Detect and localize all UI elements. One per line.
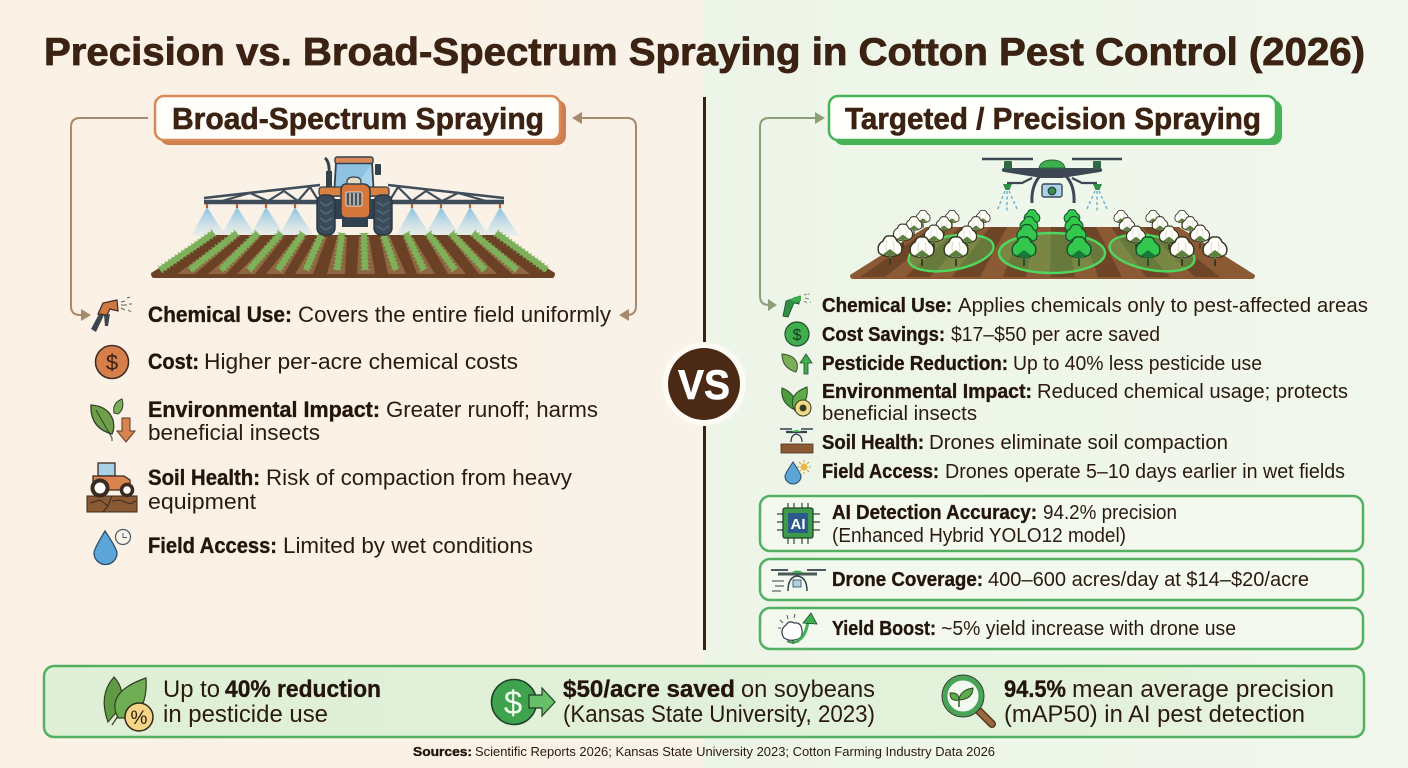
item: environmental impact: Reduced chemical usage; protects	[1037, 381, 1348, 403]
background: precision side	[704, 0, 1408, 768]
icon: leaves with percent badge	[104, 677, 153, 731]
stat: savings per acre: on soybeans	[741, 676, 875, 703]
icon: leaves with beneficial insect	[782, 387, 811, 416]
item: chemical use	[91, 297, 611, 332]
spray boom	[204, 185, 504, 208]
heading: broad-spectrum spraying	[155, 96, 566, 145]
icon: dollar coin with arrow	[492, 680, 555, 724]
item: pesticide reduction: Up to 40% less pesticide use	[1013, 353, 1262, 375]
callout: AI detection accuracy	[760, 496, 1363, 551]
item: field access: Field Access:	[822, 461, 939, 483]
heading: broad-spectrum spraying: Broad-Spectrum Spraying	[172, 101, 544, 136]
arrow: chemical use to heading, right	[572, 112, 636, 321]
item: soil health	[87, 463, 572, 514]
cotton field	[850, 227, 1255, 279]
item: field access	[785, 460, 1345, 484]
item: soil health	[780, 429, 1228, 454]
item: field access	[94, 530, 533, 564]
icon: dollar coin: $	[106, 350, 118, 375]
crop field	[151, 233, 555, 278]
item: field access: Drones operate 5–10 days earlier in wet fields	[945, 461, 1345, 483]
stat: pesticide reduction	[104, 676, 381, 731]
stat: pesticide reduction: in pesticide use	[163, 701, 328, 728]
callout: drone coverage	[760, 559, 1363, 600]
icon: AI chip: AI	[790, 516, 806, 533]
item: chemical use: Chemical Use:	[822, 295, 952, 317]
item: chemical use: Applies chemicals only to pest-affected areas	[958, 295, 1368, 317]
callout: yield boost	[760, 608, 1363, 649]
icon: leaf and up arrow	[782, 354, 812, 374]
stat: savings per acre: $50/acre saved	[563, 676, 735, 703]
icon: flying drone	[771, 570, 826, 591]
heading: targeted precision spraying: Targeted / Precision Spraying	[845, 101, 1261, 136]
icon: drone above soil	[780, 429, 813, 453]
callout: AI detection accuracy: (Enhanced Hybrid YOLO12 model)	[832, 525, 1126, 547]
banner: key statistics	[44, 666, 1364, 737]
item: cost savings	[785, 322, 1160, 346]
icon: cotton boll with up arrow	[778, 613, 817, 644]
icon: AI chip	[777, 503, 820, 544]
item: environmental impact: Environmental Impact:	[822, 381, 1032, 403]
stat: mean average precision: mean average precision	[1072, 676, 1334, 703]
icon: water drop and clock	[94, 530, 130, 564]
stat: mean average precision: (mAP50) in AI pest detection	[1004, 701, 1305, 728]
stat: pesticide reduction: 40% reduction	[225, 676, 381, 703]
icon: water drop and sun	[785, 460, 811, 484]
item: environmental impact: beneficial insects	[148, 420, 320, 445]
panel: broad-spectrum spraying	[71, 96, 636, 564]
callout: AI detection accuracy: AI Detection Accuracy:	[832, 502, 1037, 524]
icon: spray nozzle	[91, 297, 132, 332]
background: broad-spectrum side	[0, 0, 704, 768]
VS badge: VS	[678, 361, 730, 408]
callout: yield boost: Yield Boost:	[832, 618, 936, 640]
item: pesticide reduction: Pesticide Reduction:	[822, 353, 1008, 375]
panel: targeted precision spraying	[760, 96, 1368, 649]
item: pesticide reduction	[782, 353, 1262, 375]
item: environmental impact	[782, 381, 1348, 425]
icon: tractor on cracked soil	[87, 463, 137, 512]
cotton plants: untreated	[878, 210, 1227, 266]
drone	[982, 159, 1122, 203]
item: cost: Higher per-acre chemical costs	[204, 349, 518, 374]
item: soil health: equipment	[148, 489, 256, 514]
item: soil health: Soil Health:	[822, 432, 924, 454]
callout: drone coverage: 400–600 acres/day at $14–$20/acre	[988, 569, 1309, 591]
centre divider	[703, 97, 706, 650]
item: environmental impact: Environmental Impact:	[148, 397, 380, 422]
callout: yield boost: ~5% yield increase with drone use	[941, 618, 1236, 640]
illustration: drone over cotton field	[850, 159, 1255, 279]
item: soil health: Soil Health:	[148, 465, 260, 490]
sources: Scientific Reports 2026; Kansas State University 2023; Cotton Farming Industry Data 2026	[475, 745, 995, 759]
title: Precision vs. Broad-Spectrum Spraying in Cotton Pest Control (2026)	[44, 31, 1365, 74]
item: soil health: Risk of compaction from heavy	[266, 465, 572, 490]
item: cost: Cost:	[148, 349, 199, 374]
callout: drone coverage: Drone Coverage:	[832, 569, 983, 591]
stat: mean average precision: 94.5%	[1004, 676, 1066, 703]
item: cost savings: $17–$50 per acre saved	[951, 324, 1160, 346]
icon: leaf and down arrow	[91, 399, 135, 442]
illustration: tractor boom sprayer over crop rows	[151, 157, 555, 278]
stat: mean average precision	[942, 675, 1334, 728]
icon: green dollar coin	[785, 322, 809, 346]
stat: pesticide reduction: Up to	[163, 676, 220, 703]
item: field access: Field Access:	[148, 533, 277, 558]
spray droplets	[997, 191, 1108, 213]
list: broad-spectrum attributes	[87, 297, 611, 564]
tractor	[317, 157, 392, 235]
item: cost	[96, 346, 518, 378]
item: environmental impact: Greater runoff; harms	[386, 397, 598, 422]
icon: dollar coin with arrow: $	[504, 684, 522, 721]
spray cones	[191, 207, 519, 236]
item: chemical use: Covers the entire field uniformly	[298, 302, 611, 327]
item: soil health: Drones eliminate soil compaction	[929, 432, 1228, 454]
callout: AI detection accuracy: 94.2% precision	[1043, 502, 1177, 524]
stat: savings per acre: (Kansas State University, 2023)	[563, 701, 875, 728]
heading: targeted precision spraying	[829, 96, 1282, 145]
item: cost savings: Cost Savings:	[822, 324, 945, 346]
arrow: heading and chemical use link	[760, 112, 825, 311]
item: chemical use	[783, 294, 1368, 317]
icon: green dollar coin: $	[793, 327, 802, 344]
icon: green spray nozzle	[783, 294, 811, 317]
stat: savings per acre	[492, 676, 875, 728]
icon: magnifier with plant	[942, 675, 992, 724]
cotton plants: treated	[1012, 210, 1160, 266]
targeted zones	[906, 229, 1197, 277]
list: precision attributes	[780, 294, 1368, 484]
arrow: heading to chemical use, left	[71, 118, 148, 321]
VS badge	[662, 342, 746, 426]
item: environmental impact	[91, 397, 598, 445]
icon: leaves with percent badge: %	[131, 708, 148, 729]
sources: Sources:	[413, 745, 472, 759]
item: field access: Limited by wet conditions	[283, 533, 533, 558]
item: environmental impact: beneficial insects	[822, 403, 977, 425]
icon: dollar coin	[96, 346, 128, 378]
item: chemical use: Chemical Use:	[148, 302, 292, 327]
